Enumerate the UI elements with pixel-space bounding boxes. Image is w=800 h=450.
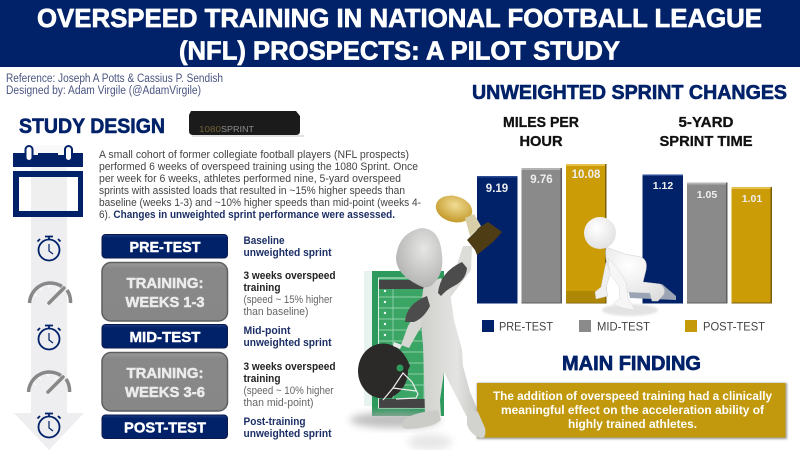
illustration: football field board	[364, 271, 444, 416]
heading: study design: STUDY DESIGN	[19, 115, 165, 138]
timeline arrow	[14, 145, 84, 450]
bar: post-test 10.08: 10.08	[572, 169, 601, 181]
reference and designer credits: Reference: Joseph A Potts & Cassius P. Sendish	[6, 73, 223, 85]
label: first training description: than baseline)	[244, 306, 308, 318]
study description paragraph: per week for 6 weeks, athletes performed nine, 5-yard overspeed	[99, 173, 401, 185]
illustration: gold football trophy	[433, 192, 502, 255]
icon: stopwatch 3	[38, 414, 60, 438]
icon: 1080 Sprint device: SPRINT	[221, 125, 254, 134]
heading: miles per hour: MILES PER	[503, 114, 579, 131]
bar: mid-test 9.76: 9.76	[530, 174, 553, 186]
panel: main finding callout	[477, 383, 787, 439]
panel: main finding callout: meaningful effect on the acceleration ability of	[501, 403, 765, 417]
title banner: OVERSPEED TRAINING IN NATIONAL FOOTBALL LEAGUE	[37, 3, 762, 33]
label: mid-test description: Mid-point	[244, 325, 291, 337]
icon: stopwatch 2	[38, 326, 60, 350]
study description paragraph: A small cohort of former collegiate football players (NFL prospects)	[99, 149, 409, 161]
bar: mid-test 1.05: 1.05	[697, 189, 717, 201]
study description paragraph: 6). Changes in unweighted sprint performance were assessed.	[99, 209, 395, 221]
illustration: football helmet	[358, 342, 418, 400]
illustration: front foot over callout	[467, 410, 485, 438]
label: first training description: (speed ~ 15% higher	[244, 294, 333, 306]
illustration: trophy figure	[396, 228, 485, 438]
box: post-test: POST-TEST	[124, 420, 206, 436]
figure: left arm	[401, 300, 432, 348]
title banner	[0, 0, 800, 67]
illustration: ground shadow	[350, 412, 452, 450]
heading: miles per hour: HOUR	[520, 133, 563, 150]
label: first training description: training	[244, 282, 280, 294]
box: pre-test: PRE-TEST	[130, 240, 201, 256]
sprinter: starting block	[628, 284, 676, 300]
label: second training description	[244, 361, 336, 409]
box: training weeks 3-6: TRAINING:	[126, 365, 204, 382]
bar: pre-test 9.19: 9.19	[486, 183, 508, 195]
sprinter: front arm	[608, 258, 635, 310]
figure: shoulder pads	[405, 262, 467, 322]
label: post-test description: Post-training	[244, 416, 306, 428]
figure: raised arm	[436, 246, 472, 302]
box: training weeks 3-6	[102, 352, 228, 411]
box: training weeks 1-3	[102, 262, 228, 321]
label: second training description: 3 weeks overspeed	[244, 361, 336, 373]
study description paragraph: performed 6 weeks of overspeed training using the 1080 Sprint. Once	[99, 161, 418, 173]
icon: speed gauge 1	[30, 283, 71, 303]
trophy: gold football	[433, 192, 475, 226]
sprinter: torso and legs	[606, 247, 664, 301]
figure: feet	[402, 410, 485, 438]
heading: 5-yard sprint time	[660, 114, 752, 150]
heading: 5-yard sprint time: 5-YARD	[678, 114, 734, 131]
sprinter: head	[584, 217, 616, 249]
heading: miles per hour	[503, 114, 579, 150]
box: training weeks 3-6: WEEKS 3-6	[125, 384, 205, 401]
bar chart: miles per hour	[477, 164, 606, 304]
legend	[482, 320, 766, 334]
box: mid-test	[102, 324, 228, 348]
legend: post-test: POST-TEST	[703, 320, 766, 334]
box: training weeks 1-3: WEEKS 1-3	[126, 294, 204, 311]
heading: main finding: MAIN FINDING	[562, 353, 701, 375]
label: pre-test description: unweighted sprint	[244, 247, 332, 259]
trophy: brown base	[467, 222, 502, 255]
box: post-test	[102, 415, 228, 438]
heading: 5-yard sprint time: SPRINT TIME	[660, 133, 752, 150]
label: pre-test description: Baseline	[244, 235, 284, 247]
bar: post-test 1.01: 1.01	[742, 193, 762, 205]
panel: main finding callout: highly trained athletes.	[568, 417, 697, 431]
study description paragraph: baseline (weeks 1-3) and ~10% higher speeds than mid-point (weeks 4-	[99, 197, 421, 209]
sprinter: rear arm	[595, 262, 612, 299]
label: second training description: (speed ~ 10% higher	[244, 385, 334, 397]
study description paragraph	[99, 149, 421, 221]
label: second training description: training	[244, 373, 280, 385]
icon: calendar	[13, 146, 83, 217]
illustration: sprinter figure	[584, 217, 676, 316]
box: pre-test	[102, 234, 228, 258]
panel: main finding callout: The addition of overspeed training had a clinically	[493, 389, 772, 403]
trophy: silver connector	[465, 214, 481, 236]
box: mid-test: MID-TEST	[130, 330, 201, 346]
label: pre-test description	[244, 235, 332, 259]
study description paragraph: sprints with assisted loads that resulted in ~15% higher speeds than	[99, 185, 405, 197]
icon: 1080 Sprint device	[189, 111, 304, 137]
icon: 1080 Sprint device: 1080	[199, 125, 222, 134]
legend: pre-test: PRE-TEST	[499, 320, 554, 334]
reference and designer credits: Designed by: Adam Virgile (@AdamVirgile)	[6, 85, 201, 97]
figure: head	[396, 228, 442, 287]
label: first training description: 3 weeks overspeed	[244, 270, 336, 282]
icon: stopwatch 1	[38, 236, 60, 260]
reference and designer credits	[6, 73, 223, 97]
label: post-test description	[244, 416, 332, 440]
sprinter: ground shadow	[602, 304, 658, 316]
label: first training description	[244, 270, 336, 318]
icon: speed gauge 2	[28, 372, 70, 392]
heading: unweighted sprint changes: UNWEIGHTED SPRINT CHANGES	[472, 82, 787, 104]
title banner: (NFL) PROSPECTS: A PILOT STUDY	[179, 36, 620, 66]
label: mid-test description	[244, 325, 332, 349]
label: mid-test description: unweighted sprint	[244, 337, 332, 349]
box: training weeks 1-3: TRAINING:	[126, 275, 204, 292]
label: post-test description: unweighted sprint	[244, 428, 332, 440]
figure: body and legs	[421, 278, 480, 421]
bar: pre-test 1.12: 1.12	[653, 180, 673, 192]
legend: mid-test: MID-TEST	[597, 320, 651, 334]
bar chart: 5-yard sprint time	[642, 174, 772, 304]
label: second training description: than mid-point)	[244, 397, 314, 409]
